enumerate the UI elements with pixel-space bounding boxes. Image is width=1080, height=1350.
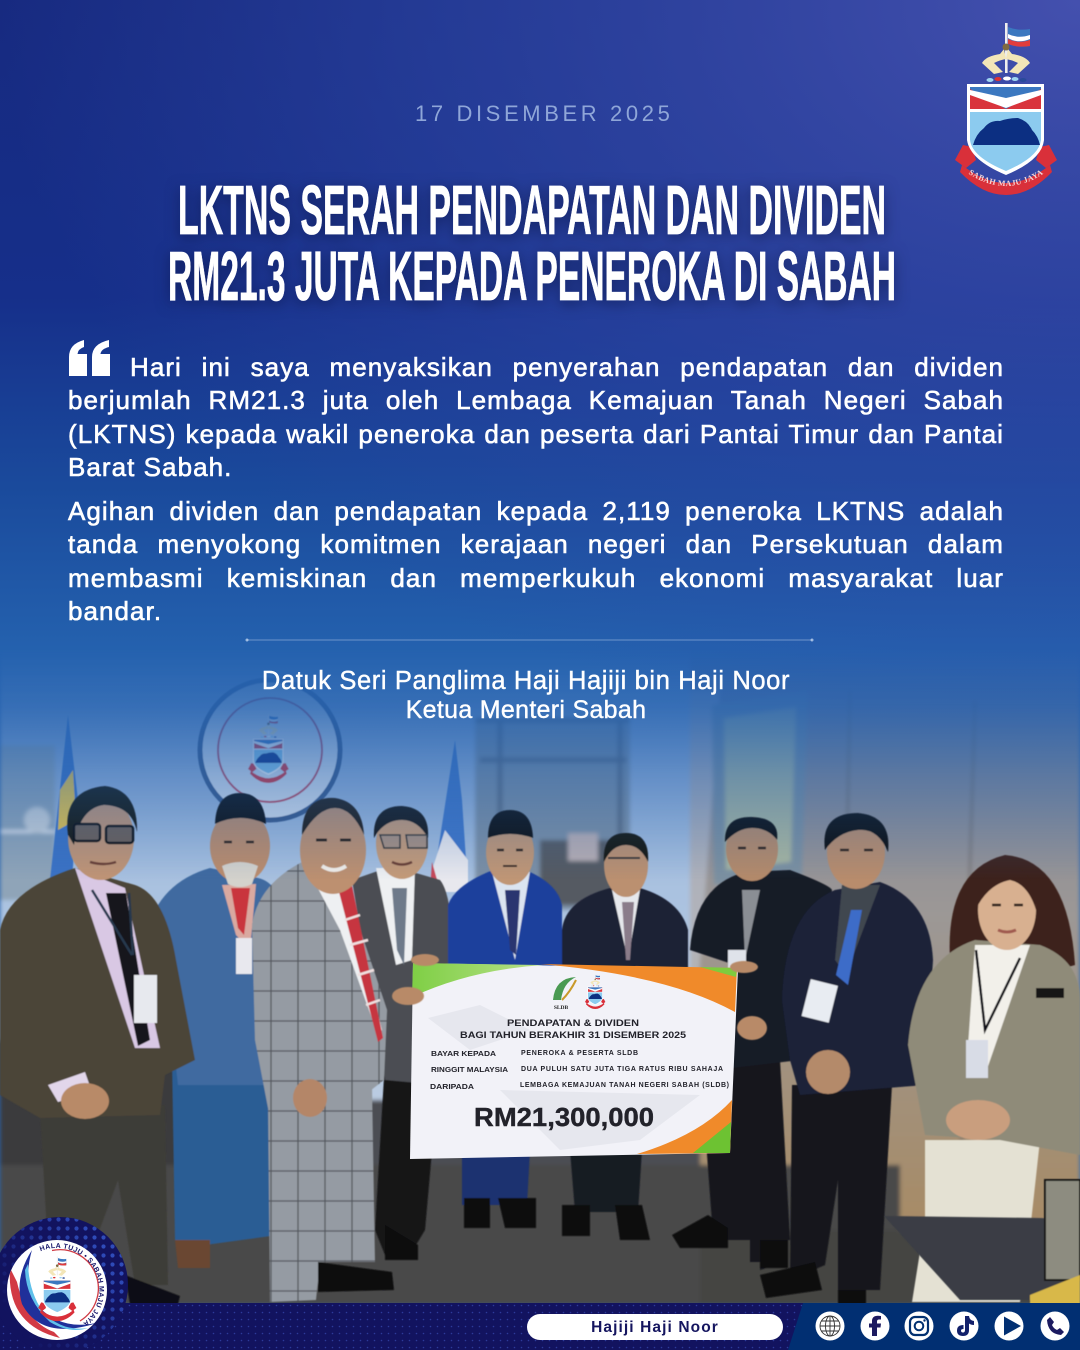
flags <box>50 715 468 892</box>
cheque text: BAYAR KEPADA <box>431 1049 497 1058</box>
cheque text: DUA PULUH SATU JUTA TIGA RATUS RIBU SAHAJA <box>521 1066 723 1073</box>
person 4 grey suit <box>352 806 452 1260</box>
desk and glass case <box>884 1180 1080 1305</box>
person 5 royal blue suit <box>448 810 562 1228</box>
attribution: Ketua Menteri Sabah <box>406 696 646 724</box>
crest: Sabah coat of arms <box>955 23 1057 195</box>
logo badge: HALA TUJU • SABAH MAJU JAYA <box>39 1243 104 1326</box>
icon: instagram <box>904 1312 934 1340</box>
icon: quotation mark <box>69 340 110 376</box>
cheque text: DARIPADA <box>430 1082 475 1091</box>
icon: video play <box>994 1312 1024 1340</box>
name pill <box>527 1314 783 1340</box>
blue fade over photo top <box>0 597 1080 872</box>
presentation cheque <box>410 963 738 1159</box>
cheque text: PENDAPATAN & DIVIDEN <box>507 1018 639 1028</box>
quote text: (LKTNS) kepada wakil peneroka dan peserta dari Pantai Timur dan Pantai <box>68 419 1004 449</box>
icon: website <box>816 1312 844 1340</box>
divider <box>246 638 814 642</box>
quote text: membasmi kemiskinan dan memperkukuh ekonomi masyarakat luar <box>68 563 1004 593</box>
crest: Sabah coat of arms: SABAH MAJU JAYA <box>968 170 1044 186</box>
wall emblem <box>200 680 340 820</box>
quote text: berjumlah RM21.3 juta oleh Lembaga Kemajuan Tanah Negeri Sabah <box>68 385 1004 415</box>
cheque text: BAGI TAHUN BERAKHIR 31 DISEMBER 2025 <box>460 1030 686 1040</box>
quote text: Agihan dividen dan pendapatan kepada 2,119 peneroka LKTNS adalah <box>68 496 1004 526</box>
person 2 blue suit <box>158 793 280 1268</box>
person 3 plaid suit <box>252 798 394 1302</box>
cheque text: PENEROKA & PESERTA SLDB <box>521 1050 638 1057</box>
date: 17 DISEMBER 2025 <box>415 101 673 126</box>
office wall and furniture <box>0 600 1080 1305</box>
icon: phone <box>1040 1312 1070 1340</box>
SLDB logo: SLDB <box>554 1005 569 1011</box>
cheque text: RINGGIT MALAYSIA <box>431 1065 509 1074</box>
title <box>164 171 901 315</box>
attribution <box>262 667 790 724</box>
person 9 woman grey blazer <box>908 855 1080 1302</box>
cheque text <box>430 1018 729 1132</box>
quote text: tanda menyokong komitmen kerajaan negeri dan Persekutuan dalam <box>68 529 1004 559</box>
logo badge <box>0 1217 128 1348</box>
icon: facebook <box>860 1312 890 1340</box>
SLDB logo <box>553 977 576 1011</box>
quote text: Hari ini saya menyaksikan penyerahan pendapatan dan dividen <box>130 352 1004 382</box>
attribution: Datuk Seri Panglima Haji Hajiji bin Haji Noor <box>262 667 790 695</box>
cheque crest <box>585 975 605 1009</box>
quote text: Barat Sabah. <box>68 452 232 482</box>
quote text <box>68 352 1004 626</box>
people group <box>0 786 1080 1304</box>
quote text: bandar. <box>68 596 162 626</box>
person 1 brown suit <box>0 786 195 1304</box>
footer bar <box>0 1217 1080 1350</box>
person 8 navy suit, blue tie <box>760 813 933 1304</box>
person 6 navy suit <box>562 833 688 1240</box>
cheque text: LEMBAGA KEMAJUAN TANAH NEGERI SABAH (SLDB) <box>520 1082 729 1089</box>
cheque text: RM21,300,000 <box>474 1102 654 1132</box>
icon: tiktok <box>950 1312 978 1340</box>
name pill: Hajiji Haji Noor <box>591 1319 719 1336</box>
hands on cheque <box>392 954 767 1040</box>
person 7 black suit <box>672 817 832 1270</box>
